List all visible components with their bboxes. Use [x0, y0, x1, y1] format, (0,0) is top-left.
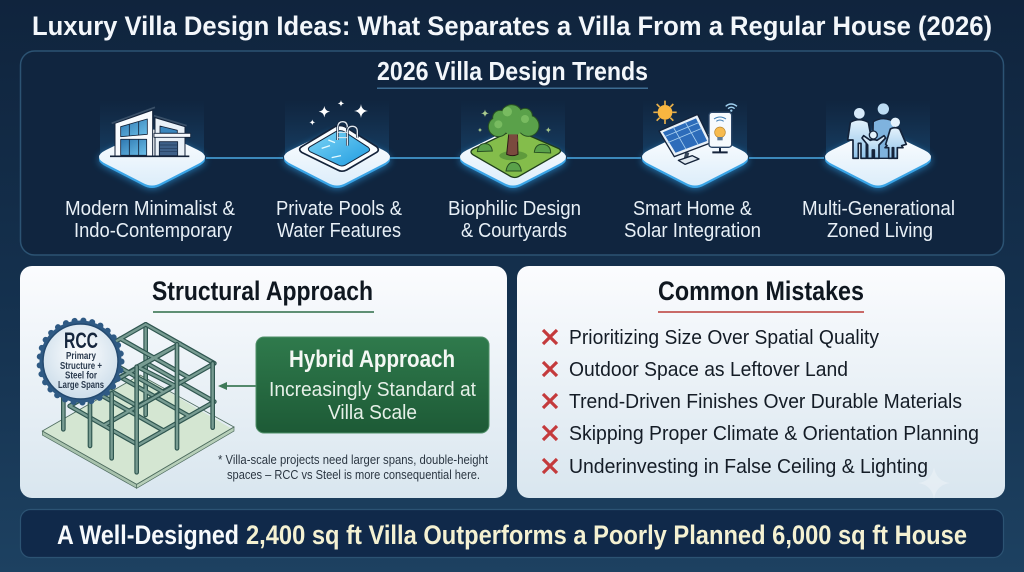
callout: hybrid approach: Hybrid Approach [289, 346, 455, 373]
trend: modern minimalist [65, 100, 235, 242]
icon: faint sparkle [918, 467, 950, 499]
icon: cross [543, 362, 557, 376]
badge: RCC: Primary [66, 350, 96, 362]
arrow: hybrid to frame [218, 382, 256, 390]
panel: 2026 villa design trends [20, 51, 1004, 255]
label: modern minimalist [65, 197, 235, 242]
label: smart home and solar: Smart Home & [633, 197, 752, 220]
panel: structural approach [20, 266, 507, 498]
label: private pools [276, 197, 402, 242]
trend: biophilic design [448, 100, 581, 242]
label: modern minimalist: Modern Minimalist & [65, 197, 235, 220]
label: multi-generational living: Zoned Living [827, 219, 933, 242]
badge: RCC: Structure + [60, 360, 102, 372]
trend: smart home and solar [624, 100, 761, 242]
item 4: Skipping Proper Climate & Orientation Planning [569, 422, 979, 445]
icon: modern house [110, 107, 191, 156]
icon: cross [543, 394, 557, 408]
label: multi-generational living: Multi-Generational [802, 197, 955, 220]
trend: multi-generational living [802, 100, 955, 242]
heading: trends: 2026 Villa Design Trends [377, 56, 648, 86]
icon: tree and courtyard [471, 105, 560, 177]
label: private pools: Private Pools & [276, 197, 402, 220]
label: modern minimalist: Indo-Contemporary [74, 219, 233, 242]
item 1: Prioritizing Size Over Spatial Quality [569, 326, 880, 349]
banner: takeaway [20, 510, 1004, 558]
trend: private pools [276, 100, 402, 242]
badge: RCC [40, 320, 122, 402]
label: biophilic design: Biophilic Design [448, 197, 581, 220]
footnote: * Villa-scale projects need larger spans, double-height [218, 452, 488, 467]
title: Luxury Villa Design Ideas: What Separates a Villa From a Regular House (2026) [32, 11, 992, 41]
icon: pool [300, 100, 378, 171]
footnote: spaces – RCC vs Steel is more consequential here. [227, 467, 480, 482]
item 2: Outdoor Space as Leftover Land [569, 358, 848, 381]
label: smart home and solar [624, 197, 761, 242]
item 5: Underinvesting in False Ceiling & Lighting [569, 455, 928, 478]
footnote [218, 452, 488, 482]
badge: RCC: RCC [64, 328, 98, 353]
icon: cross [543, 330, 557, 344]
badge: RCC: Large Spans [58, 379, 104, 391]
label: smart home and solar: Solar Integration [624, 219, 761, 242]
item 3: Trend-Driven Finishes Over Durable Materials [569, 390, 962, 413]
label: multi-generational living [802, 197, 955, 242]
icon: cross [543, 426, 557, 440]
connector line [206, 156, 824, 160]
illustration: hybrid structure frame [42, 324, 234, 488]
heading: structural approach: Structural Approach [152, 276, 373, 306]
icon: family [848, 103, 906, 158]
callout: hybrid approach: Villa Scale [328, 402, 417, 424]
callout: hybrid approach [256, 337, 489, 433]
icon: solar panel and smart device [653, 101, 737, 164]
panel: common mistakes [517, 266, 1005, 499]
callout: hybrid approach: Increasingly Standard at [269, 379, 476, 401]
label: private pools: Water Features [277, 219, 401, 242]
heading: common mistakes: Common Mistakes [658, 276, 864, 306]
list: mistakes [543, 326, 979, 478]
icon: cross [543, 459, 557, 473]
banner: takeaway: A Well-Designed [57, 520, 239, 550]
label: biophilic design: & Courtyards [461, 219, 567, 242]
label: biophilic design [448, 197, 581, 242]
badge: RCC: Steel for [65, 370, 97, 382]
